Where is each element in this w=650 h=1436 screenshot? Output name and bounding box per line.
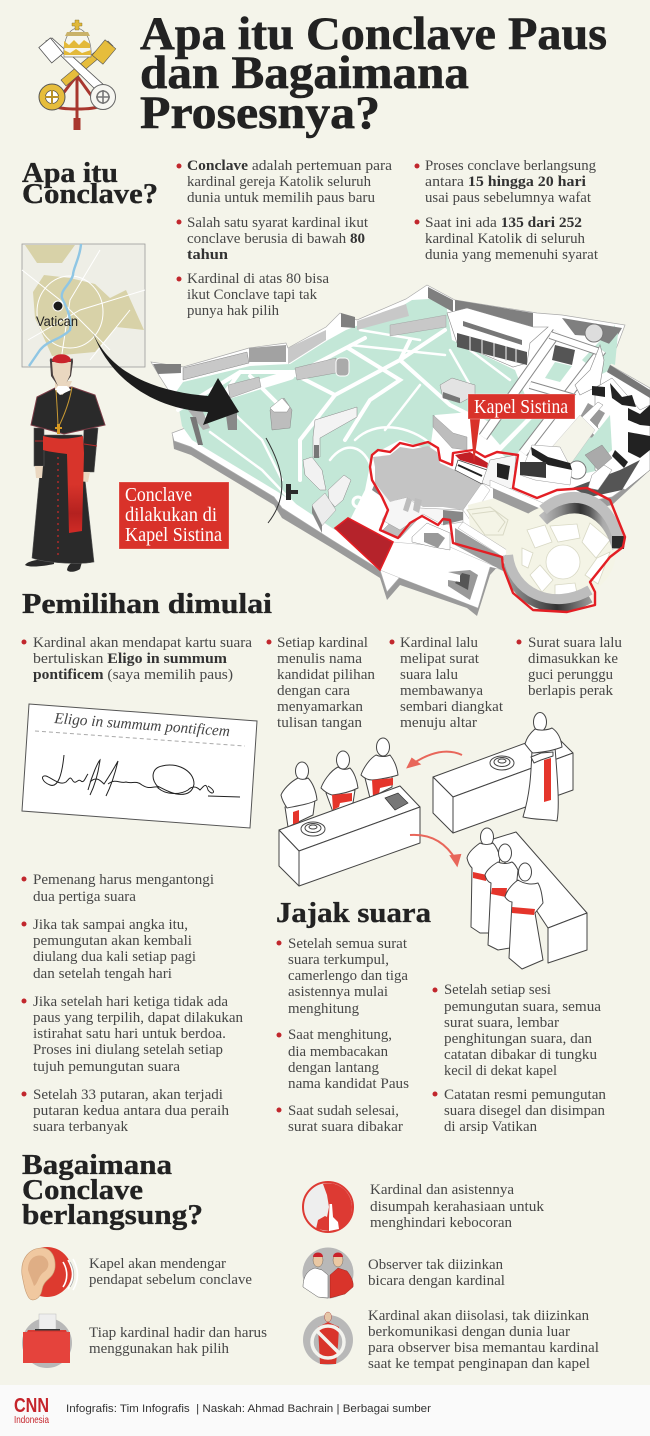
red outline (370, 442, 625, 612)
text block: definisi conclave kiri: ikut Conclave tapi tak (187, 286, 317, 303)
text block: definisi conclave kanan (414, 157, 599, 263)
sleeves (34, 428, 98, 472)
text block: pembakaran: Setelah setiap sesi (444, 981, 551, 998)
illustration: kardinal (25, 354, 105, 572)
callout: Conclave dilakukan di Kapel Sistina (119, 482, 229, 549)
text block: isolasi: para observer bisa memantau kardinal (368, 1339, 599, 1356)
text block: definisi conclave kiri: Salah satu syarat kardinal ikut (187, 214, 369, 231)
gardens small buildings (190, 358, 475, 533)
illustration: altar tiga kardinal (467, 828, 587, 969)
hands (35, 466, 90, 482)
logo CNN (14, 1395, 49, 1426)
title (140, 8, 607, 139)
text block: mendengar: Kapel akan mendengar (89, 1255, 226, 1272)
arrow: ke kanan bawah (410, 835, 460, 865)
text block: definisi conclave kiri: tahun (187, 246, 229, 263)
text block: pembakaran: di arsip Vatikan (444, 1118, 537, 1135)
text block: melipat surat: suara lalu (400, 666, 458, 683)
heading: Apa itu Conclave: Apa itu (22, 157, 118, 189)
text block: pembakaran: kecil di dekat kapel (444, 1062, 557, 1079)
logo CNN: Indonesia (14, 1415, 49, 1426)
text block: menghitung: menghitung (288, 1000, 359, 1017)
perimeter inner walls (153, 287, 622, 430)
heading: Bagaimana Conclave berlangsung: Bagaimana (22, 1149, 173, 1181)
text block: sumpah: Kardinal dan asistennya (370, 1181, 514, 1198)
text block: syarat kemenangan: paus yang terpilih, dapat dilakukan (33, 1009, 243, 1026)
illustration: Vatican complex map (151, 285, 650, 616)
logo CNN: CNN (14, 1395, 49, 1417)
Kapel Sistina highlighted (455, 452, 488, 484)
footer (0, 1385, 650, 1436)
text block: definisi conclave kiri: Conclave adalah pertemuan para (187, 157, 392, 174)
heading: Bagaimana Conclave berlangsung: Conclave (22, 1174, 143, 1206)
text block: pembakaran: penghitungan suara, dan (444, 1030, 592, 1047)
text block: syarat kemenangan: Pemenang harus mengantongi (33, 871, 214, 888)
text block: menulis nama: dengan cara (277, 682, 350, 699)
label: Kapel Sistina (468, 394, 575, 463)
text block: definisi conclave kiri: dunia untuk memilih paus baru (187, 189, 375, 206)
label: Kapel Sistina: Kapel Sistina (474, 396, 568, 418)
heading: Apa itu Conclave: Conclave? (22, 178, 158, 210)
text block: syarat kemenangan: pemungutan akan kembali (33, 932, 192, 949)
card: kartu suara (22, 704, 257, 828)
text block: menghitung: Saat sudah selesai, (288, 1102, 399, 1119)
neck and face (55, 381, 72, 395)
text block: definisi conclave kiri: punya hak pilih (187, 302, 279, 319)
icon: papal emblem (39, 20, 116, 130)
base top (151, 285, 650, 608)
heading: Jajak suara: Jajak suara (276, 897, 432, 929)
text block: syarat kemenangan (22, 871, 243, 1135)
base extrusion (151, 285, 650, 616)
text block: mendengar: pendapat sebelum conclave (89, 1271, 252, 1288)
signature (43, 755, 240, 797)
text block: definisi conclave kiri: conclave berusia di bawah 80 (187, 230, 365, 247)
text block: syarat kemenangan: dua pertiga suara (33, 888, 136, 905)
heading: Bagaimana Conclave berlangsung: berlangsung? (22, 1199, 203, 1231)
illustration: tiga kardinal di altar (279, 738, 420, 886)
title: dan Bagaimana (140, 47, 469, 99)
text block: isolasi: Kardinal akan diisolasi, tak diizinkan (368, 1307, 589, 1324)
illustration: altar penghitungan kanan atas (433, 712, 573, 833)
text block: isolasi: berkomunikasi dengan dunia luar (368, 1323, 570, 1340)
text block: hak pilih: Tiap kardinal hadir dan harus (89, 1324, 267, 1341)
text block: guci: Surat suara lalu (528, 634, 622, 651)
text block: syarat kemenangan: dan setelah tengah hari (33, 965, 172, 982)
callout: Conclave dilakukan di Kapel Sistina: Conclave (125, 484, 192, 506)
text block: kartu suara: pontificem (saya memilih paus) (33, 666, 233, 683)
text block: melipat surat: membawanya (400, 682, 483, 699)
Piazza San Pietro (467, 497, 625, 607)
text block: pembakaran (432, 981, 606, 1135)
text block: sumpah (370, 1181, 544, 1231)
text block: definisi conclave kanan: kardinal Katolik di seluruh (425, 230, 585, 247)
text block: observer: Observer tak diizinkan (368, 1256, 503, 1273)
museums (447, 308, 618, 453)
text block: menulis nama (266, 634, 375, 731)
gardens (176, 298, 525, 530)
text block: menulis nama: menulis nama (277, 650, 362, 667)
text block: kartu suara: bertuliskan Eligo in summum (33, 650, 227, 667)
icon: kotak suara (22, 1314, 72, 1368)
text block: sumpah: disumpah kerahasiaan untuk (370, 1198, 544, 1215)
text block: menghitung: Saat menghitung, (288, 1026, 392, 1043)
colonnade south (508, 563, 590, 607)
icon: telinga (22, 1247, 78, 1300)
roads (178, 330, 510, 510)
colonnade north (543, 507, 618, 548)
text block: kartu suara: Kardinal akan mendapat kartu suara (33, 634, 252, 651)
callout: Conclave dilakukan di Kapel Sistina: dilakukan di (125, 504, 217, 526)
text block: guci: dimasukkan ke (528, 650, 618, 667)
text block: observer: bicara dengan kardinal (368, 1272, 505, 1289)
text block: menulis nama: kandidat pilihan (277, 666, 375, 683)
text block: sumpah: menghindari kebocoran (370, 1214, 512, 1231)
text block: definisi conclave kanan: Proses conclave berlangsung (425, 157, 596, 174)
robe (32, 435, 94, 563)
cape (31, 387, 105, 434)
text block: mendengar (89, 1255, 252, 1288)
text block: definisi conclave kanan: antara 15 hingga 20 hari (425, 173, 586, 190)
map: inset Roma (22, 244, 145, 367)
text block: syarat kemenangan: suara terbanyak (33, 1118, 128, 1135)
text block: pembakaran: Catatan resmi pemungutan (444, 1086, 606, 1103)
text block: definisi conclave kanan: usai paus sebelumnya wafat (425, 189, 592, 206)
icon: isolasi (303, 1312, 353, 1365)
text block: menghitung: Setelah semua surat (288, 935, 408, 952)
rope (53, 73, 101, 120)
arrow: peta ke Vatikan (93, 333, 239, 425)
text block: syarat kemenangan: tujuh pemungutan suara (33, 1058, 180, 1075)
text block: syarat kemenangan: Setelah 33 putaran, akan terjadi (33, 1086, 223, 1103)
text block: isolasi: saat ke tempat penginapan dan kapel (368, 1355, 590, 1372)
text block: melipat surat: menuju altar (400, 714, 477, 731)
text block: syarat kemenangan: istirahat satu hari untuk berdoa. (33, 1025, 226, 1042)
text block: menulis nama: Setiap kardinal (277, 634, 368, 651)
sash (43, 436, 84, 533)
text block: guci (516, 634, 622, 699)
text block: syarat kemenangan: putaran kedua antara dua peraih (33, 1102, 229, 1119)
text block: guci: guci perunggu (528, 666, 613, 683)
arrow: ke kiri (408, 752, 462, 767)
corridor to colonnade (412, 455, 543, 571)
text block: pembakaran: surat suara, lembar (444, 1014, 559, 1031)
text block: hak pilih: menggunakan hak pilih (89, 1340, 229, 1357)
text block: menghitung (276, 935, 409, 1135)
text block: menghitung: camerlengo dan tiga (288, 967, 408, 984)
text block: pembakaran: catatan dibakar di tungku (444, 1046, 597, 1063)
text block: menulis nama: tulisan tangan (277, 714, 362, 731)
text block: melipat surat: melipat surat (400, 650, 480, 667)
card: kartu suara: Eligo in summum pontificem (53, 710, 230, 740)
text block: definisi conclave kiri: kardinal gereja Katolik seluruh (187, 173, 371, 190)
text block: syarat kemenangan: Jika setelah hari ketiga tidak ada (33, 993, 228, 1010)
text block: definisi conclave kiri: Kardinal di atas 80 bisa (187, 270, 329, 287)
callout: Conclave dilakukan di Kapel Sistina: Kapel Sistina (125, 524, 222, 546)
text block: guci: berlapis perak (528, 682, 613, 699)
text block: observer (368, 1256, 505, 1289)
basilica (372, 446, 490, 538)
heading: Bagaimana Conclave berlangsung (22, 1149, 203, 1231)
right cluster (520, 365, 650, 497)
tiara (64, 20, 91, 57)
white key (39, 38, 116, 109)
text block: isolasi (368, 1307, 599, 1372)
text block: kartu suara (22, 634, 252, 683)
text block: definisi conclave kanan: dunia yang memenuhi syarat (425, 246, 599, 263)
text block: definisi conclave kiri (176, 157, 392, 319)
credits: Infografis: Tim Infografis | Naskah: Ahmad Bachrain | Berbagai sumber (66, 1403, 431, 1415)
heading: Pemilihan dimulai: Pemilihan dimulai (22, 588, 272, 620)
icon: sumpah kerahasiaan (303, 1182, 353, 1232)
text block: syarat kemenangan: diulang dua kali setiap pagi (33, 948, 196, 965)
text block: pembakaran: suara disegel dan disimpan (444, 1102, 605, 1119)
red triangle (335, 518, 393, 570)
wing bottom left (380, 542, 503, 608)
text block: melipat surat (390, 634, 504, 731)
figur kardinal berdiri (523, 712, 562, 821)
curved gallery near basilica (433, 415, 467, 450)
title: Apa itu Conclave Paus (140, 8, 607, 60)
text block: syarat kemenangan: Jika tak sampai angka itu, (33, 916, 188, 933)
icon: observer dan kardinal (302, 1248, 354, 1298)
shoes (25, 559, 82, 572)
text block: menghitung: dengan lantang (288, 1059, 379, 1076)
buttons (57, 457, 59, 555)
gold key (39, 40, 116, 110)
map: inset Roma: Vatican (36, 314, 78, 329)
text block: menghitung: suara terkumpul, (288, 951, 389, 968)
text block: menulis nama: menyamarkan (277, 698, 363, 715)
guci (490, 756, 514, 770)
text block: menghitung: surat suara dibakar (288, 1118, 403, 1135)
text block: menghitung: dia membacakan (288, 1043, 388, 1060)
heading: Apa itu Conclave (22, 157, 158, 210)
text block: pembakaran: pemungutan suara, semua (444, 998, 601, 1015)
chain cross (56, 387, 72, 428)
text block: menghitung: asistennya mulai (288, 983, 388, 1000)
text block: menghitung: nama kandidat Paus (288, 1075, 409, 1092)
text block: melipat surat: Kardinal lalu (400, 634, 478, 651)
text block: hak pilih (89, 1324, 267, 1357)
text block: syarat kemenangan: Proses ini diulang setelah setiap (33, 1041, 223, 1058)
text block: definisi conclave kanan: Saat ini ada 135 dari 252 (425, 214, 582, 231)
title: Prosesnya? (140, 87, 380, 139)
text block: melipat surat: sembari diangkat (400, 698, 504, 715)
